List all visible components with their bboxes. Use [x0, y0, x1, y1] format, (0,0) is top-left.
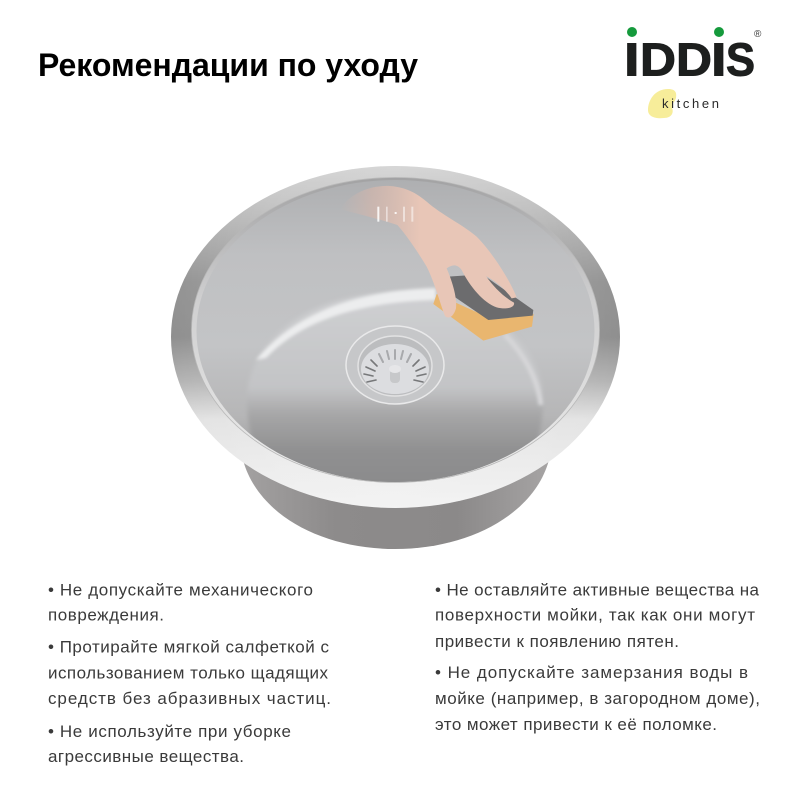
text column: right — [435, 580, 760, 734]
logo wordmark: I — [711, 34, 726, 86]
logo wordmark: S — [726, 34, 755, 86]
hand with sponge — [340, 186, 534, 341]
bullet: mechanical damage — [48, 580, 313, 624]
bullet: freezing water: мойке (например, в загородном доме), — [435, 689, 760, 708]
logo green dots — [627, 27, 724, 37]
text column: left — [48, 580, 331, 766]
logo wordmark: I — [624, 34, 640, 86]
sink inner wall — [196, 180, 594, 482]
bullet: aggressive substances: агрессивные вещества. — [48, 747, 244, 766]
hand — [340, 186, 517, 318]
logo registered mark: ® — [754, 29, 762, 40]
drain — [346, 326, 444, 404]
bullet: aggressive substances: • Не используйте при уборке — [48, 722, 291, 741]
bullet: freezing water — [435, 663, 760, 734]
bullet: soft cloth — [48, 638, 331, 708]
bullet: freezing water: • Не допускайте замерзания воды в — [435, 663, 748, 682]
bullet: soft cloth: средств без абразивных частиц. — [48, 689, 331, 708]
logo: IDDIS kitchen — [624, 27, 762, 118]
sponge body — [433, 294, 534, 341]
bullet: mechanical damage: • Не допускайте механического — [48, 580, 313, 600]
logo wordmark: D — [640, 34, 676, 86]
logo kitchen caption: kitchen — [662, 96, 719, 111]
bullet: active substances: поверхности мойки, так как они могут — [435, 606, 755, 624]
bullet: freezing water: это может привести к её поломке. — [435, 715, 717, 734]
logo wordmark: D — [676, 34, 712, 86]
bullet: active substances: привести к появлению пятен. — [435, 632, 679, 651]
logo yellow blob — [648, 89, 676, 118]
bullet: soft cloth: использованием только щадящих — [48, 664, 328, 682]
sink outer bowl — [243, 460, 549, 549]
bullet: aggressive substances — [48, 722, 291, 766]
bullet: soft cloth: • Протирайте мягкой салфеткой с — [48, 638, 330, 656]
sink rim — [171, 166, 620, 508]
drain flange — [346, 326, 444, 404]
bullet: active substances — [435, 580, 760, 651]
bullet: mechanical damage: повреждения. — [48, 606, 164, 624]
sink illustration — [171, 166, 620, 549]
drain strainer — [361, 344, 429, 394]
logo wordmark — [624, 34, 755, 86]
drain knob — [378, 374, 412, 394]
sink inner edge — [192, 178, 600, 482]
title: Рекомендации по уходу — [38, 47, 418, 83]
sink floor — [247, 293, 543, 490]
floor highlight — [256, 288, 436, 360]
sponge abrasive pad — [448, 275, 533, 320]
watermark marks — [377, 207, 413, 222]
bullet: active substances: • Не оставляйте активные вещества на — [435, 580, 760, 600]
